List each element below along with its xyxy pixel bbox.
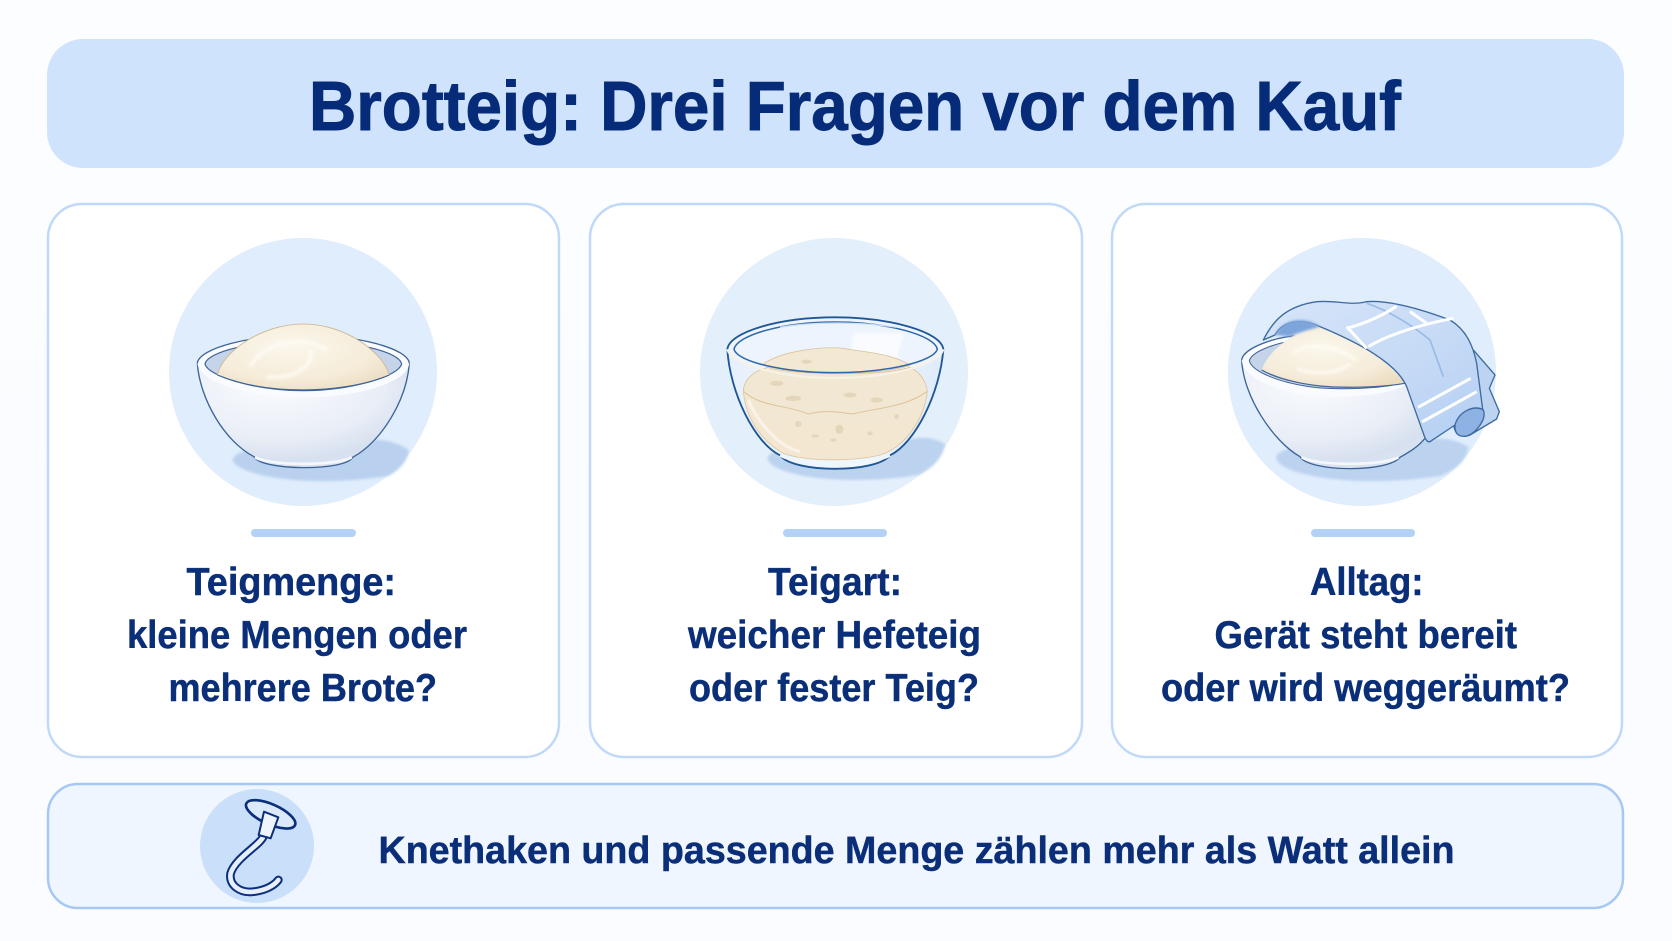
question text: Teigmenge:	[186, 561, 396, 604]
note text: Knethaken und passende Menge zählen mehr als Watt allein	[378, 830, 1454, 872]
panel: bottom note	[48, 784, 1623, 908]
panel: Teigart	[590, 204, 1082, 757]
icon: bowl covered with towel	[1228, 238, 1499, 506]
divider bar	[1311, 529, 1415, 537]
question text	[127, 561, 467, 710]
divider bar	[783, 529, 887, 537]
question text: weicher Hefeteig	[687, 614, 981, 657]
panel: Teigmenge	[48, 204, 559, 757]
icon: dough in white bowl	[169, 238, 437, 506]
question text	[1161, 561, 1570, 710]
question text: mehrere Brote?	[168, 667, 437, 710]
header banner	[47, 39, 1624, 168]
divider bar	[251, 529, 356, 537]
question text: Teigart:	[768, 561, 902, 604]
question text: Gerät steht bereit	[1214, 614, 1517, 657]
question text: oder fester Teig?	[689, 667, 979, 710]
question text: oder wird weggeräumt?	[1161, 667, 1570, 710]
title: Brotteig: Drei Fragen vor dem Kauf	[309, 67, 1402, 145]
question text: kleine Mengen oder	[127, 614, 467, 657]
panel: Alltag	[1112, 204, 1622, 757]
icon: soft dough in glass bowl	[700, 238, 968, 506]
icon: dough hook	[200, 789, 314, 903]
question text: Alltag:	[1310, 561, 1424, 604]
question text	[687, 561, 981, 710]
